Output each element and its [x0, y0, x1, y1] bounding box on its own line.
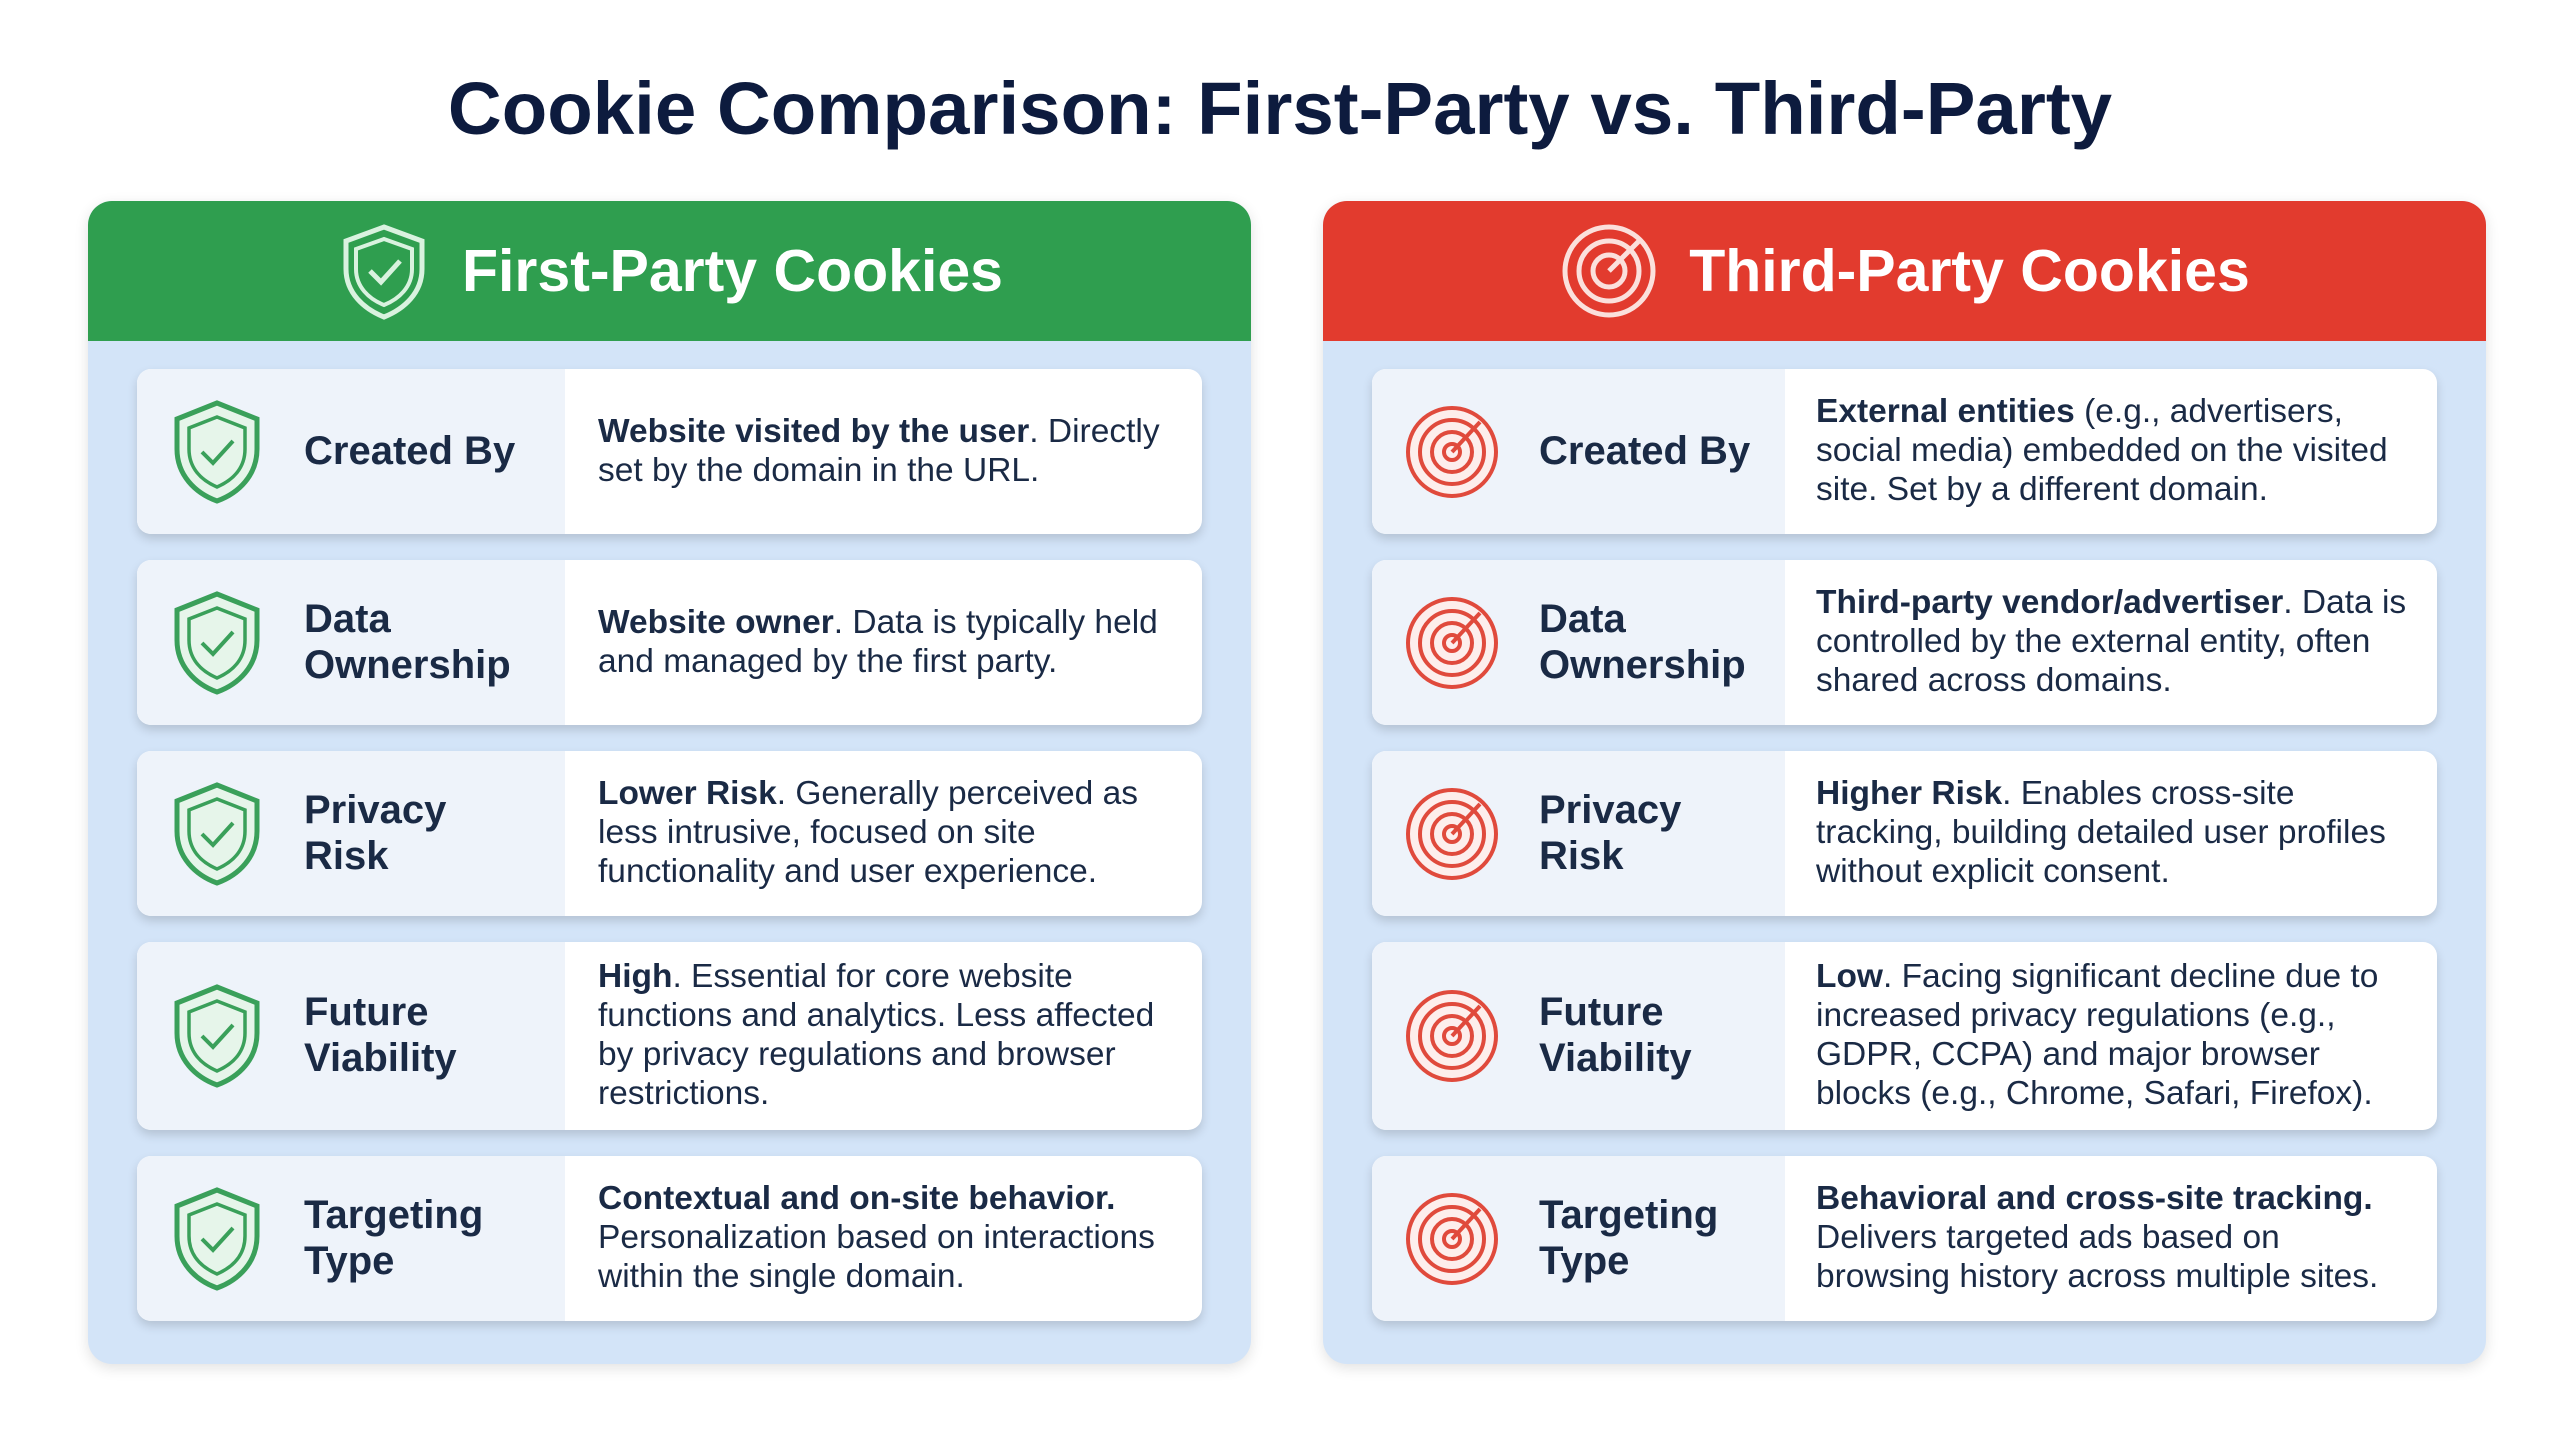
row: targeting type: Type	[304, 1239, 394, 1283]
row: targeting type: browsing history across multiple sites.	[1816, 1258, 2378, 1295]
row: created by: Created By	[304, 429, 515, 473]
row: data ownership: Ownership	[1539, 643, 1746, 687]
row: privacy risk: without explicit consent.	[1816, 853, 2170, 890]
row: future viability: GDPR, CCPA) and major browser	[1816, 1036, 2320, 1073]
row: created by	[1372, 369, 2437, 534]
row: future viability: Future	[1539, 990, 1663, 1034]
row: targeting type: Targeting	[1539, 1193, 1718, 1237]
header: first-party	[88, 201, 1251, 341]
row: future viability: Future	[304, 990, 428, 1034]
icon: target	[1406, 406, 1498, 498]
row: data ownership: Data	[304, 597, 391, 641]
row: targeting type: Behavioral and cross-site tracking.	[1816, 1180, 2373, 1217]
row: targeting type	[137, 1156, 1202, 1321]
row: targeting type: Contextual and on-site behavior. Personalization based on interactions within the single domain.	[598, 1180, 1155, 1295]
row: targeting type: Targeting	[304, 1193, 483, 1237]
row: created by: Website visited by the user. Directly set by the domain in the URL.	[598, 413, 1160, 489]
row: created by: External entities (e.g., advertisers,	[1816, 393, 2343, 430]
row: data ownership: Website owner. Data is typically held and managed by the first party.	[598, 604, 1158, 680]
row: created by: Created By	[1539, 429, 1750, 473]
row: privacy risk: Risk	[1539, 834, 1624, 878]
row: targeting type: Type	[1539, 1239, 1629, 1283]
row: privacy risk	[1372, 751, 2437, 916]
row: data ownership: Ownership	[304, 643, 511, 687]
row: data ownership: Third-party vendor/advertiser. Data is	[1816, 584, 2406, 621]
header: first-party: First-Party Cookies	[462, 238, 1003, 304]
row: future viability: Viability	[304, 1036, 457, 1080]
panel: third-party	[1323, 201, 2486, 1364]
row: future viability: increased privacy regulations (e.g.,	[1816, 997, 2336, 1034]
panel: first-party	[88, 201, 1251, 1364]
row: privacy risk: Lower Risk. Generally perceived as less intrusive, focused on site functionality and user experience.	[598, 775, 1138, 890]
row: privacy risk: Privacy	[1539, 788, 1681, 832]
header: third-party: Third-Party Cookies	[1689, 238, 2250, 304]
icon: shield	[174, 400, 260, 504]
row: privacy risk: Privacy	[304, 788, 446, 832]
row: future viability: Viability	[1539, 1036, 1692, 1080]
row: data ownership	[137, 560, 1202, 725]
row: future viability	[137, 942, 1202, 1130]
row: created by: social media) embedded on the visited	[1816, 432, 2388, 469]
row: privacy risk: Higher Risk. Enables cross-site	[1816, 775, 2294, 812]
row: data ownership	[1372, 560, 2437, 725]
row: created by	[137, 369, 1202, 534]
row: privacy risk: tracking, building detailed user profiles	[1816, 814, 2386, 851]
row: future viability: High. Essential for core website functions and analytics. Less affected by privacy regulations and browser restrictions.	[598, 958, 1154, 1112]
row: data ownership: Data	[1539, 597, 1626, 641]
row: future viability: Low. Facing significant decline due to	[1816, 958, 2378, 995]
row: privacy risk: Risk	[304, 834, 388, 878]
row: privacy risk	[137, 751, 1202, 916]
row: created by: site. Set by a different domain.	[1816, 471, 2268, 508]
row: future viability	[1372, 942, 2437, 1130]
title: Cookie Comparison: First-Party vs. Third-Party	[448, 67, 2112, 150]
row: data ownership: shared across domains.	[1816, 662, 2172, 699]
row: targeting type: Delivers targeted ads based on	[1816, 1219, 2280, 1256]
header: third-party	[1323, 201, 2486, 341]
row: data ownership: controlled by the external entity, often	[1816, 623, 2370, 660]
row: targeting type	[1372, 1156, 2437, 1321]
row: future viability: blocks (e.g., Chrome, Safari, Firefox).	[1816, 1075, 2373, 1112]
